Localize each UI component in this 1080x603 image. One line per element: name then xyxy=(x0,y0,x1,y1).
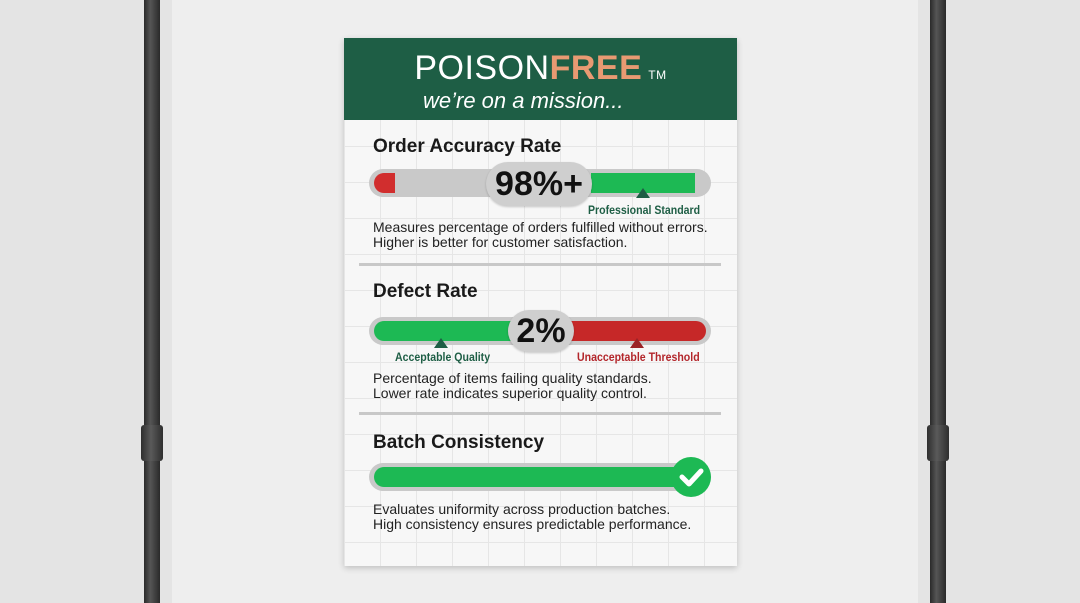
heading: batch consistency: Batch Consistency xyxy=(373,432,544,453)
icon: check xyxy=(671,457,711,497)
description: defect rate xyxy=(373,370,652,401)
bar: defect rate xyxy=(369,317,711,345)
label: acceptable quality: Acceptable Quality xyxy=(395,350,490,364)
bar: order accuracy xyxy=(369,169,711,197)
whiteboard background xyxy=(172,0,918,603)
tagline: we’re on a mission... xyxy=(423,88,624,113)
description: batch consistency: Evaluates uniformity across production batches. xyxy=(373,501,670,517)
value pill 2%: 2% xyxy=(516,312,566,350)
poster xyxy=(344,38,737,566)
description: defect rate: Percentage of items failing quality standards. xyxy=(373,370,652,386)
bar: batch consistency xyxy=(369,463,711,491)
description: order accuracy xyxy=(373,219,708,250)
heading: defect rate: Defect Rate xyxy=(373,281,478,302)
right pole joint xyxy=(927,425,949,461)
description: order accuracy: Measures percentage of orders fulfilled without errors. xyxy=(373,219,708,235)
marker: professional standard xyxy=(636,188,650,198)
marker: acceptable xyxy=(434,338,448,348)
label: unacceptable threshold: Unacceptable Threshold xyxy=(577,350,700,364)
value pill 2% xyxy=(508,310,574,352)
description: defect rate: Lower rate indicates superior quality control. xyxy=(373,385,647,401)
logo: POISONFREE TM xyxy=(414,49,667,87)
description: batch consistency xyxy=(373,501,691,532)
right stand pole xyxy=(930,0,946,603)
marker: unacceptable xyxy=(630,338,644,348)
heading: order accuracy: Order Accuracy Rate xyxy=(373,136,561,157)
label: professional standard: Professional Standard xyxy=(588,203,700,217)
left pole joint xyxy=(141,425,163,461)
value pill 98%+: 98%+ xyxy=(495,165,583,203)
left stand pole xyxy=(144,0,160,603)
description: batch consistency: High consistency ensures predictable performance. xyxy=(373,516,691,532)
header xyxy=(344,38,737,120)
description: order accuracy: Higher is better for customer satisfaction. xyxy=(373,234,627,250)
